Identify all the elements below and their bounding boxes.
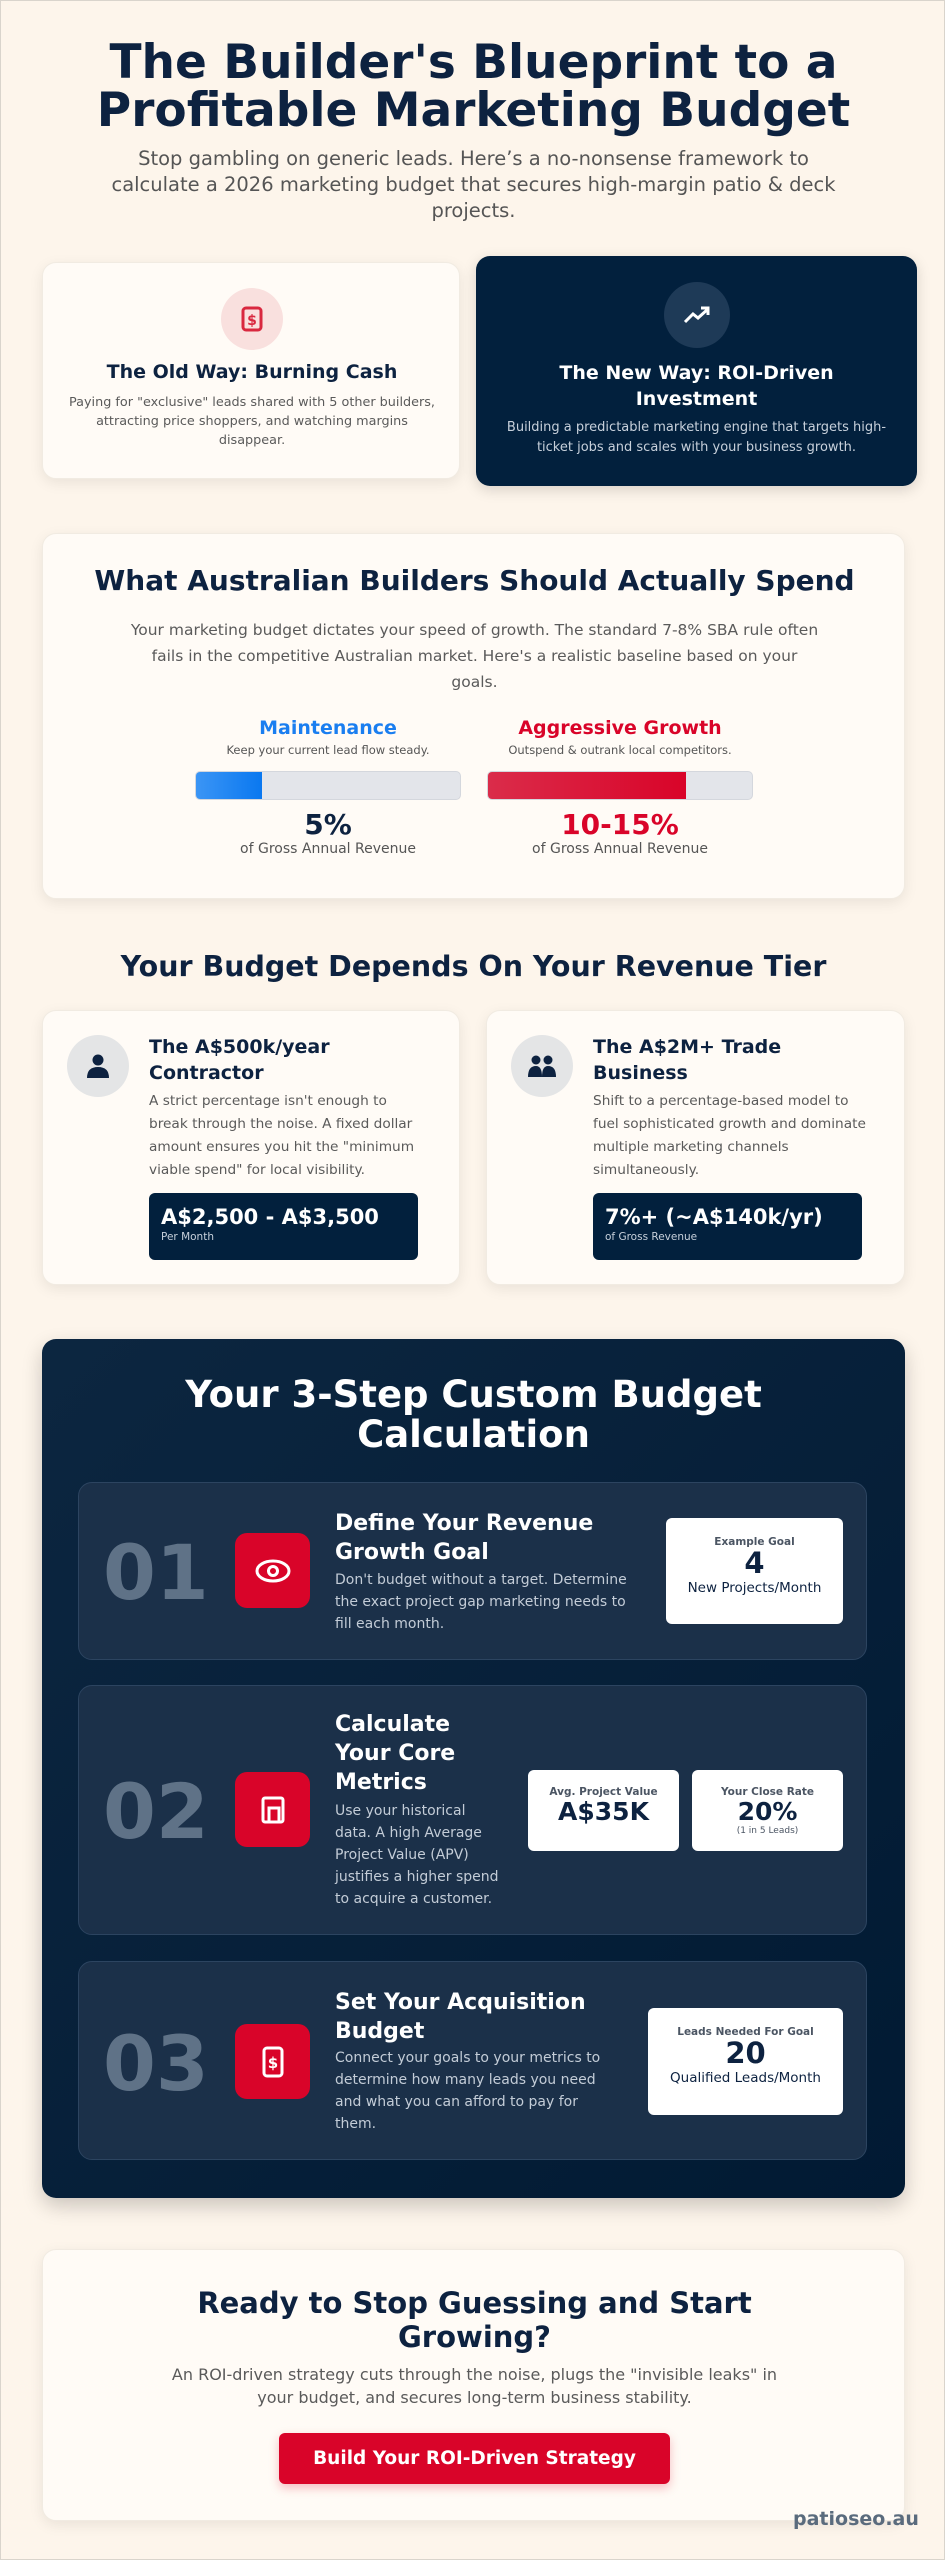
text: Project Value (APV): [335, 1847, 469, 1863]
number: 01: [103, 1528, 209, 1617]
text: simultaneously.: [593, 1162, 699, 1178]
title: Growth Goal: [335, 1540, 489, 1565]
text: determine how many leads you need: [335, 2072, 596, 2088]
callout: Per Month: [161, 1231, 214, 1243]
icon: dollar: [235, 2024, 310, 2099]
text: disappear.: [219, 433, 285, 448]
heading: Business: [593, 1062, 688, 1084]
panel: old way: [42, 262, 460, 479]
text: your budget, and secures long-term business stability.: [257, 2388, 692, 2407]
heading: Your 3-Step Custom Budget: [185, 1373, 762, 1416]
chart: aggressive growth: of Gross Annual Revenue: [532, 841, 708, 857]
chart: aggressive growth: [487, 717, 753, 857]
heading: revenue tier: Your Budget Depends On Your Revenue Tier: [121, 950, 826, 983]
stat: 4: [744, 1546, 765, 1580]
subtitle: projects.: [431, 199, 516, 222]
text: [334, 1803, 499, 1907]
text: fuel sophisticated growth and dominate: [593, 1116, 866, 1132]
text: attracting price shoppers, and watching margins: [96, 414, 408, 429]
text: An ROI-driven strategy cuts through the noise, plugs the "invisible leaks" in: [172, 2365, 777, 2384]
text: Building a predictable marketing engine that targets high-: [507, 420, 886, 435]
stat: Leads Needed For Goal: [677, 2026, 814, 2038]
heading: Contractor: [149, 1062, 264, 1084]
text: Shift to a percentage-based model to: [593, 1093, 849, 1109]
icon: dollar: $: [267, 2054, 278, 2072]
stat: [648, 2008, 843, 2115]
heading: The New Way: ROI-Driven Investment: [559, 362, 834, 410]
icon: trend up: [664, 282, 730, 348]
text: fill each month.: [335, 1616, 444, 1632]
stat: APV: A$35K: [558, 1797, 649, 1826]
text: fails in the competitive Australian market. Here's a realistic baseline based on your: [152, 647, 797, 665]
text: goals.: [451, 673, 498, 691]
text: [130, 621, 818, 691]
text: justifies a higher spend: [335, 1869, 499, 1885]
stat: 20: [725, 2036, 766, 2070]
icon: eye: [235, 1533, 310, 1608]
text: the exact project gap marketing needs to: [335, 1594, 626, 1610]
heading: [149, 1036, 330, 1084]
callout: [593, 1193, 862, 1260]
text: [507, 420, 886, 455]
chart: aggressive growth: 10-15%: [561, 808, 679, 841]
stat: close rate: Your Close Rate: [721, 1786, 814, 1798]
subtitle: calculate a 2026 marketing budget that secures high-margin patio & deck: [111, 173, 836, 196]
title: Set Your Acquisition: [335, 1990, 586, 2015]
callout: [149, 1193, 418, 1260]
chart: maintenance: [195, 717, 461, 857]
text: and what you can afford to pay for: [335, 2094, 578, 2110]
heading: Ready to Stop Guessing and Start Growing?: [197, 2286, 752, 2354]
heading: The A$500k/year: [149, 1036, 330, 1058]
callout: 7%+ (~A$140k/yr): [605, 1205, 823, 1229]
panel: 3-step calculation: [42, 1339, 905, 2198]
stat: APV: [528, 1770, 679, 1851]
heading: [184, 1373, 762, 1456]
stat: close rate: [692, 1770, 843, 1851]
stat: New Projects/Month: [688, 1580, 821, 1596]
text: Your marketing budget dictates your speed of growth. The standard 7-8% SBA rule often: [131, 621, 818, 639]
step 2: [78, 1685, 867, 1935]
number: 03: [103, 2019, 209, 2108]
icon: group: [511, 1035, 573, 1097]
title: Define Your Revenue: [335, 1511, 593, 1536]
chart: aggressive growth: Aggressive Growth: [518, 717, 722, 739]
text: viable spend" for local visibility.: [149, 1162, 365, 1178]
panel: what builders should spend: [42, 533, 905, 899]
heading: [593, 1036, 781, 1084]
icon: burning cash: $: [247, 313, 257, 329]
text: Don't budget without a target. Determine: [335, 1572, 627, 1588]
text: A strict percentage isn't enough to: [149, 1093, 387, 1109]
footer brand: patioseo.au: [793, 2508, 919, 2530]
text: [69, 395, 435, 448]
title: Metrics: [335, 1770, 427, 1795]
chart: maintenance: Keep your current lead flow steady.: [226, 743, 430, 757]
subtitle: Stop gambling on generic leads. Here’s a no-nonsense framework to: [138, 147, 809, 170]
heading: What Australian Builders Should Actually Spend: [94, 564, 855, 597]
chart: maintenance: 5%: [304, 808, 352, 841]
stat: close rate: 20%: [738, 1797, 797, 1826]
text: Connect your goals to your metrics to: [335, 2050, 600, 2066]
subtitle: [111, 147, 836, 222]
heading: The A$2M+ Trade: [593, 1036, 781, 1058]
stat: Qualified Leads/Month: [670, 2070, 821, 2086]
panel: CTA: [42, 2249, 905, 2521]
title: Your Core: [335, 1741, 455, 1766]
step 3: [78, 1961, 867, 2160]
text: [335, 2050, 600, 2132]
title: [335, 1511, 593, 1565]
title: [335, 1990, 586, 2044]
panel: A$500k contractor: [42, 1010, 460, 1285]
title: Profitable Marketing Budget: [97, 83, 850, 138]
stat: Example Goal: [714, 1536, 795, 1548]
heading: Calculation: [357, 1413, 590, 1456]
text: multiple marketing channels: [593, 1139, 789, 1155]
chart: maintenance: of Gross Annual Revenue: [240, 841, 416, 857]
heading: The Old Way: Burning Cash: [107, 361, 397, 383]
title: Calculate: [335, 1712, 450, 1737]
text: break through the noise. A fixed dollar: [149, 1116, 412, 1132]
text: Paying for "exclusive" leads shared with 5 other builders,: [69, 395, 435, 410]
text: data. A high Average: [335, 1825, 482, 1841]
title: [97, 35, 850, 138]
title: [334, 1712, 455, 1795]
title: The Builder's Blueprint to a: [109, 35, 838, 90]
text: [172, 2365, 777, 2407]
button: Build Your ROI-Driven Strategy: [313, 2448, 636, 2469]
button: [279, 2433, 670, 2484]
text: amount ensures you hit the "minimum: [149, 1139, 414, 1155]
stat: [666, 1518, 843, 1624]
stat: APV: Avg. Project Value: [549, 1786, 658, 1798]
text: them.: [335, 2116, 376, 2132]
text: Use your historical: [335, 1803, 465, 1819]
text: [593, 1093, 866, 1178]
title: Budget: [335, 2019, 424, 2044]
step 1: [78, 1482, 867, 1660]
chart: aggressive growth: Outspend & outrank local competitors.: [508, 743, 732, 757]
number: 02: [103, 1767, 209, 1856]
stat: close rate: (1 in 5 Leads): [737, 1826, 798, 1836]
icon: person: [67, 1035, 129, 1097]
text: [149, 1093, 414, 1178]
icon: burning cash: [221, 288, 283, 350]
text: to acquire a customer.: [335, 1891, 492, 1907]
chart: maintenance: Maintenance: [259, 717, 397, 739]
panel: A$2M trade business: [486, 1010, 905, 1285]
panel: new way: [476, 256, 917, 486]
callout: A$2,500 - A$3,500: [161, 1205, 379, 1229]
callout: of Gross Revenue: [605, 1231, 697, 1243]
text: ticket jobs and scales with your business growth.: [537, 440, 856, 455]
text: [335, 1572, 627, 1632]
icon: calculator: [235, 1772, 310, 1847]
